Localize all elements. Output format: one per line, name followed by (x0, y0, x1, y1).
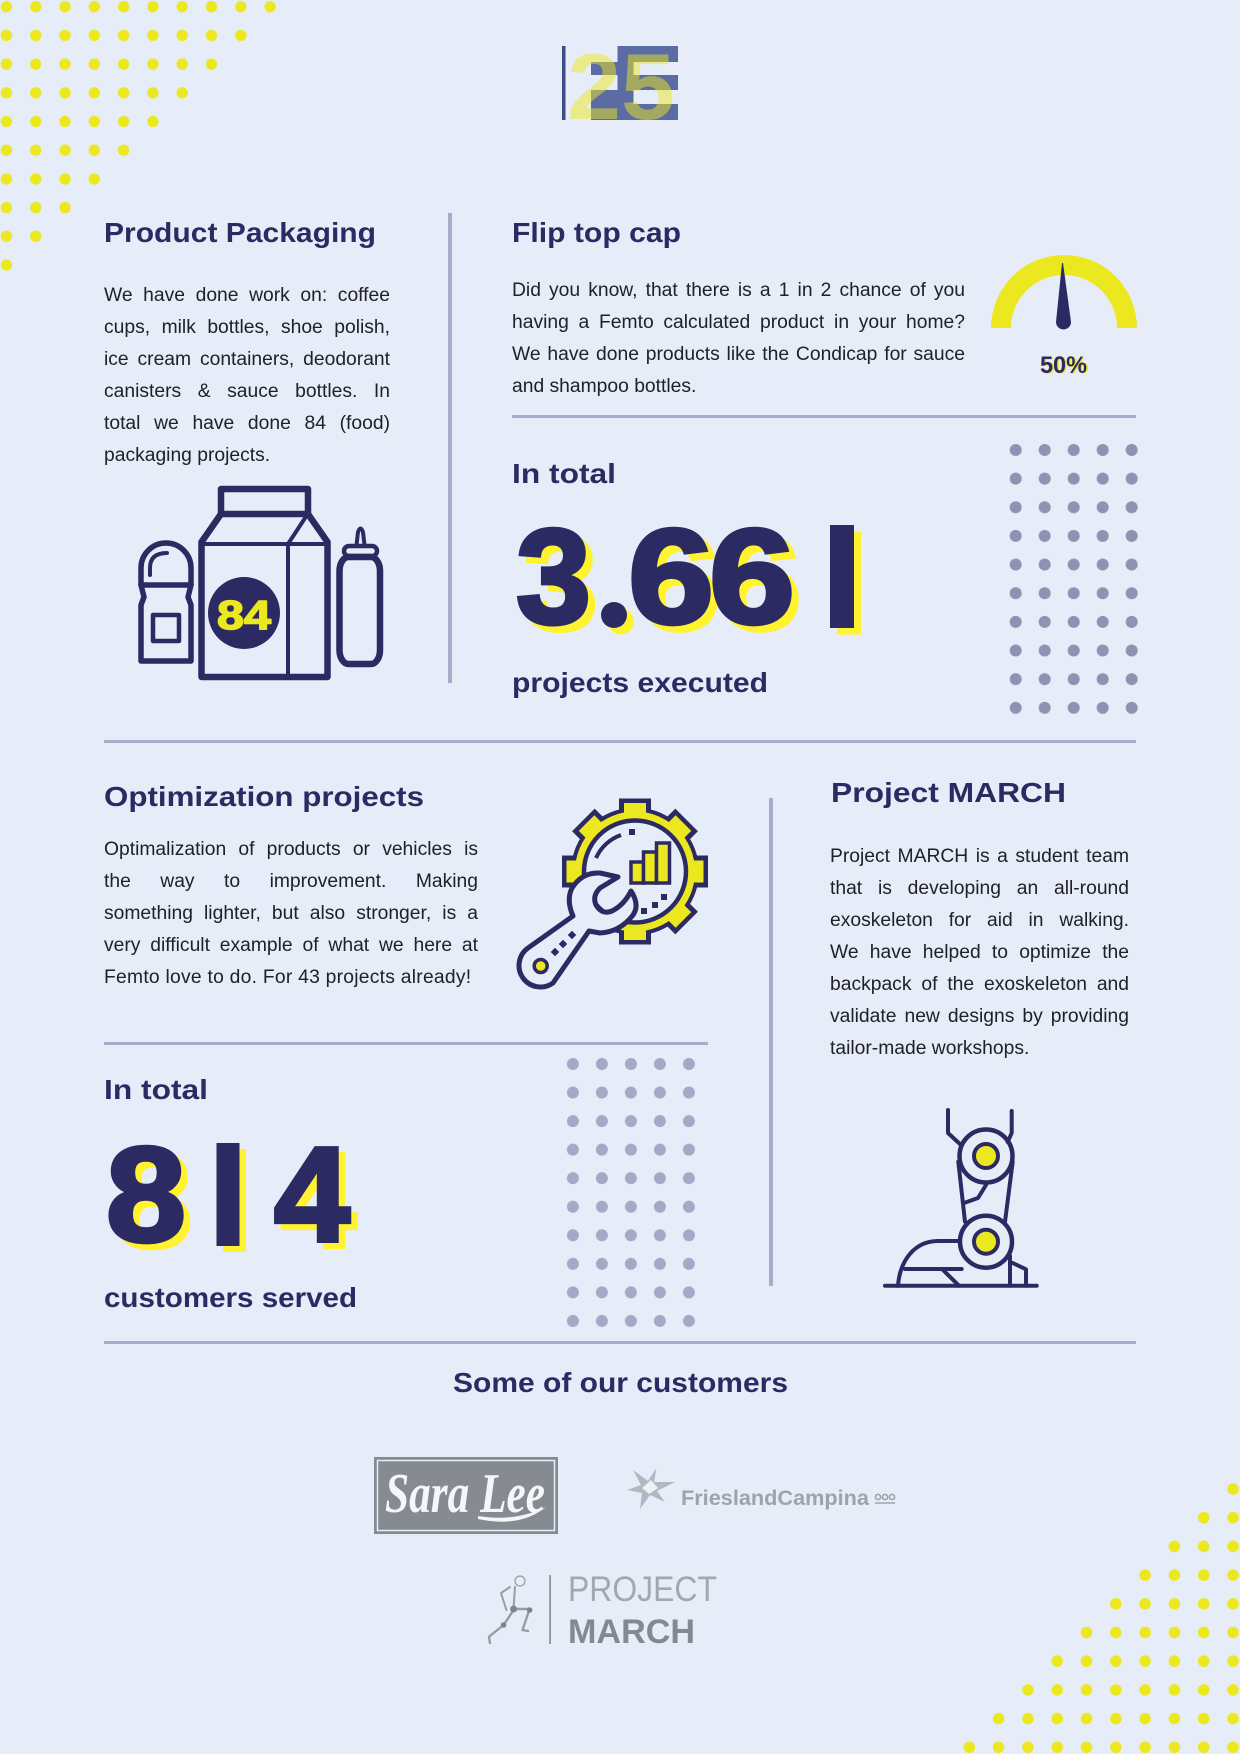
icon: packaging products with 84 badge (141, 489, 380, 677)
text block: optimization description (104, 839, 478, 988)
decorative dots: top left corner (0, 0, 276, 271)
logo: sara lee (374, 1457, 558, 1534)
number: 814 with yellow shadow: 1 (192, 1121, 270, 1272)
text block: flip top cap description: and shampoo bottles. (512, 376, 696, 397)
text block: packaging description: ice cream containers, deodorant (104, 349, 390, 370)
text block: flip top cap description (512, 280, 965, 397)
number: 814 with yellow shadow: 8 (106, 1119, 186, 1270)
heading: optimization projects: Optimization projects (104, 781, 424, 812)
text block: project march description: We have helped to optimize the (830, 942, 1129, 963)
caption: projects executed: projects executed (512, 667, 768, 698)
dot grid: grey (1001, 436, 1146, 722)
panel: total projects executed (512, 444, 1138, 714)
number: 3.661 with yellow shadow: 6 (635, 508, 721, 658)
panel: total customers served (104, 1058, 695, 1328)
text block: project march description: exoskeleton for aid in walking. (830, 910, 1129, 931)
text block: project march description (830, 846, 1129, 1059)
text block: project march description: that is developing an all-round (830, 878, 1129, 899)
text block: flip top cap description: having a Femto calculated product in your home? (512, 312, 965, 333)
text block: packaging description: total we have done 84 (food) (104, 413, 390, 434)
number: 3.661 with yellow shadow: 3 (523, 508, 598, 658)
text block: optimization description: something lighter, but also stronger, is a (104, 903, 478, 924)
heading: project march: Project MARCH (831, 777, 1066, 808)
text block: project march description: Project MARCH is a student team (830, 846, 1129, 867)
number: 3.661 with yellow shadow: 6 (709, 501, 795, 652)
panel: optimization projects (104, 781, 708, 990)
text block: project march description: tailor-made workshops. (830, 1038, 1029, 1059)
logo: project march: PROJECT (568, 1570, 717, 1609)
text block: project march description: validate new designs by providing (830, 1006, 1129, 1027)
caption: customers served: customers served (104, 1282, 357, 1313)
logo: frieslandcampina (627, 1468, 895, 1510)
number: 3.661 with yellow shadow: 6 (716, 508, 802, 658)
number: 814 with yellow shadow (108, 1143, 358, 1252)
text block: flip top cap description: Did you know, that there is a 1 in 2 chance of you (512, 280, 965, 301)
text block: optimization description: the way to improvement. Making (104, 871, 478, 892)
dot grid: light grey (558, 1050, 703, 1335)
logo: project march (489, 1570, 717, 1651)
gauge: 50 percent: 50% (1040, 352, 1087, 379)
number: 3.661 with yellow shadow: . (595, 503, 635, 654)
heading: in total: In total (104, 1074, 208, 1105)
text block: packaging description: canisters & sauce bottles. In (104, 381, 390, 402)
number: 3.661 with yellow shadow: 3 (516, 501, 591, 652)
text block: packaging description: We have done work on: coffee (104, 285, 390, 306)
text block: packaging description: cups, milk bottles, shoe polish, (104, 317, 390, 338)
number: 3.661 with yellow shadow: 1 (805, 503, 883, 654)
logo: project march: MARCH (568, 1613, 695, 1651)
gauge: 50 percent (991, 255, 1137, 380)
number: 3.661 with yellow shadow: 6 (628, 501, 714, 652)
icon: robotic exoskeleton leg (885, 1110, 1037, 1286)
panel: product packaging (104, 217, 390, 680)
number: 814 with yellow shadow: 4 (280, 1125, 356, 1276)
number: 814 with yellow shadow: 8 (112, 1125, 192, 1276)
number: 814 with yellow shadow: 4 (274, 1119, 350, 1270)
logo: sara lee: Sara Lee (385, 1463, 545, 1525)
heading: some of our customers: Some of our customers (453, 1367, 788, 1398)
icon: gear and wrench with bar chart (519, 798, 708, 987)
text block: optimization description: Optimalization of products or vehicles is (104, 839, 478, 860)
panel: customers (374, 1367, 896, 1651)
heading: in total: In total (512, 458, 616, 489)
number: 3.661 with yellow shadow (516, 525, 861, 634)
logo: frieslandcampina: FrieslandCampina (681, 1487, 869, 1510)
panel: flip top cap (512, 217, 1137, 397)
heading: flip top cap: Flip top cap (512, 217, 681, 248)
panel: project march (830, 777, 1129, 1288)
text block: packaging description (104, 285, 390, 466)
text block: optimization description: Femto love to do. For 43 projects already! (104, 967, 471, 988)
icon: packaging products with 84 badge: 84 (217, 592, 271, 638)
text block: project march description: backpack of the exoskeleton and (830, 974, 1129, 995)
text block: flip top cap description: We have done products like the Condicap for sauce (512, 344, 965, 365)
logo: 25 anniversary mark: 25 (567, 34, 675, 139)
text block: packaging description: packaging projects. (104, 445, 270, 466)
text block: optimization description: very difficult example of what we here at (104, 935, 478, 956)
heading: product packaging: Product Packaging (104, 217, 376, 248)
gauge: 50 percent: 50% (1042, 353, 1088, 380)
